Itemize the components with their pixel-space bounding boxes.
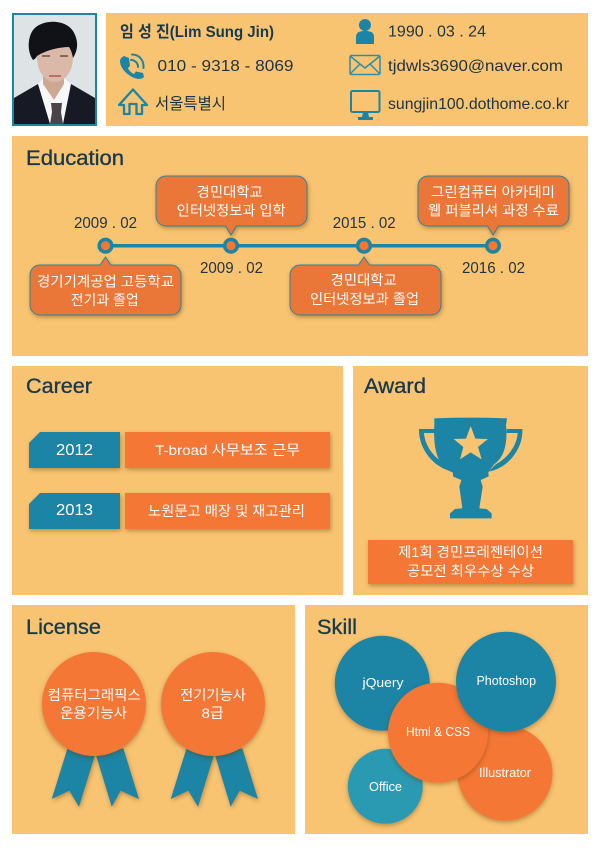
callout: university graduation: 경민대학교 xyxy=(331,272,397,288)
date 2015.02: 2015 . 02 xyxy=(333,215,396,232)
email: tjdwls3690@naver.com xyxy=(388,58,563,75)
callout: high school: 전기과 졸업 xyxy=(71,292,139,308)
badge: computer graphics xyxy=(42,652,146,807)
badge: computer graphics: 컴퓨터그래픽스 xyxy=(48,687,141,703)
badge: electrician: 8급 xyxy=(202,705,224,721)
icon: house xyxy=(119,90,147,114)
career row 2013: 노원문고 매장 및 재고관리 xyxy=(148,503,305,519)
panel: contact info xyxy=(106,13,588,126)
timeline xyxy=(99,239,499,252)
skill: Illustrator xyxy=(458,726,552,820)
skill: jQuery xyxy=(335,636,430,731)
callout: green computer academy: 그린컴퓨터 아카데미 xyxy=(431,184,555,200)
skill: Illustrator: Illustrator xyxy=(479,765,532,780)
date 2009.02 second: 2009 . 02 xyxy=(200,260,263,277)
name: 임 성 진(Lim Sung Jin) xyxy=(120,23,274,41)
website: sungjin100.dothome.co.kr xyxy=(388,96,570,113)
heading: career: Career xyxy=(26,375,92,398)
icon: phone xyxy=(120,54,144,79)
career row 2012: 2012 xyxy=(56,442,93,459)
panel: career xyxy=(12,366,343,595)
badge: electrician xyxy=(161,652,265,807)
career row 2012: T-broad 사무보조 근무 xyxy=(155,442,300,458)
callout: university entrance xyxy=(156,176,307,235)
icon: mail xyxy=(350,56,380,74)
callout: green computer academy xyxy=(418,176,569,235)
panel: skill xyxy=(305,605,588,834)
career row 2013 xyxy=(29,493,330,529)
heading: education: Education xyxy=(26,147,124,170)
award caption: 공모전 최우수상 수상 xyxy=(407,563,534,579)
panel: education xyxy=(12,136,588,356)
callout: university graduation xyxy=(290,257,441,315)
address: 서울특별시 xyxy=(155,95,226,113)
panel: license xyxy=(12,605,295,834)
award caption: 제1회 경민프레젠테이션 xyxy=(398,544,543,560)
career row 2013: 2013 xyxy=(56,502,93,519)
callout: green computer academy: 웹 퍼블리셔 과정 수료 xyxy=(428,203,559,219)
badge: computer graphics: 운용기능사 xyxy=(60,705,127,721)
date 2016.02: 2016 . 02 xyxy=(462,260,525,277)
panel: award xyxy=(353,366,588,595)
callout: high school xyxy=(30,257,181,315)
photo portrait xyxy=(13,14,96,125)
birth date: 1990 . 03 . 24 xyxy=(388,24,486,40)
skill: Html and CSS: Html & CSS xyxy=(406,724,470,739)
skill: Office xyxy=(348,749,423,824)
heading: skill: Skill xyxy=(317,616,357,639)
callout: university entrance: 인터넷정보과 입학 xyxy=(177,203,286,219)
icon: person xyxy=(356,19,374,44)
icon: trophy xyxy=(419,418,522,518)
skill: Office: Office xyxy=(369,779,402,794)
award caption xyxy=(368,540,573,584)
heading: license: License xyxy=(26,616,101,639)
career row 2012 xyxy=(29,432,330,468)
skill: Photoshop: Photoshop xyxy=(476,673,536,688)
skill: Photoshop xyxy=(456,632,556,732)
callout: high school: 경기기계공업 고등학교 xyxy=(37,274,174,290)
icon: monitor xyxy=(351,91,380,120)
callout: university graduation: 인터넷정보과 졸업 xyxy=(310,291,419,307)
phone number: 010 - 9318 - 8069 xyxy=(158,58,294,75)
skill: jQuery: jQuery xyxy=(361,675,404,690)
date 2009.02 first: 2009 . 02 xyxy=(74,215,137,232)
callout: university entrance: 경민대학교 xyxy=(197,184,263,200)
heading: award: Award xyxy=(364,375,426,398)
badge: electrician: 전기기능사 xyxy=(180,687,246,703)
skill: Html and CSS xyxy=(388,683,488,783)
